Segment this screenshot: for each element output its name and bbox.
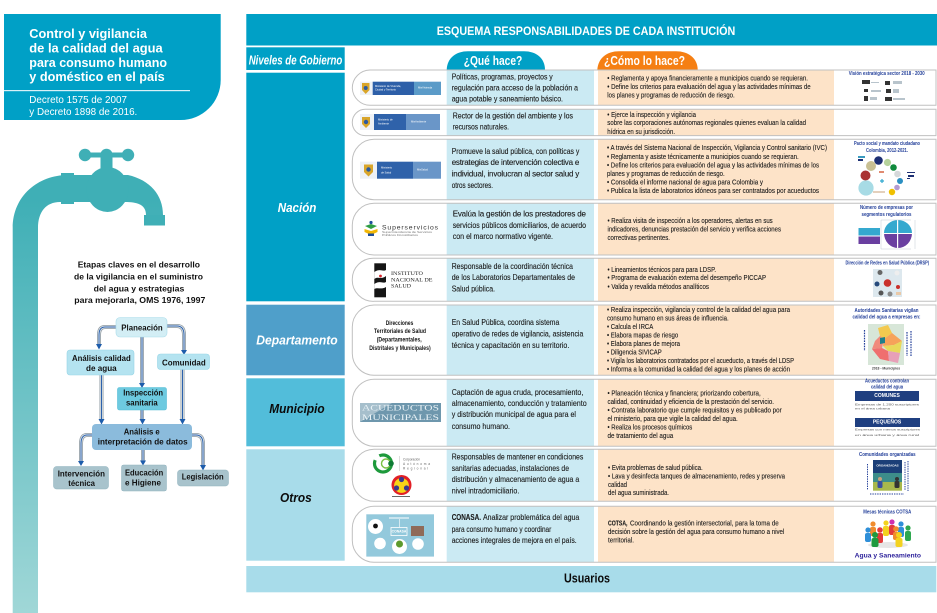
logo: Superservicios: Superservicios [382,224,439,232]
panel: title [4,14,221,120]
how: inspection [607,110,806,136]
what: environment: Rector de la gestión del ambiente y los [453,112,573,120]
box: Análisis calidad de agua [67,350,134,375]
logo: Superservicios: Superintendencia de Servicios [382,230,433,234]
image: aqueducts control quality: calidad del agua [871,384,904,390]
what: evaluates: servicios públicos domiciliarios, de acuerdo [453,221,586,230]
image: organized communities: ORGANIZADAS [876,464,899,468]
box: Análisis e interpretación de datos: Análisis e [124,427,160,437]
what: water capture: Captación de agua cruda, procesamiento, [452,388,583,397]
how: inspection and risk maps: • Diligencia SIVICAP [607,348,662,356]
what: water capture: consumo humano. [452,422,510,431]
logo: Ministerio de Ambiente: MinAmbiente [411,120,427,124]
box: Análisis e interpretación de datos: interpretación de datos [98,436,188,446]
logos: autonomous corporations [374,455,430,497]
how: technical planning: calidad, continuidad y eficiencia de la prestación del servicio. [608,397,774,406]
label: territorial health directorates: Direcciones [386,320,414,327]
what: environment [453,112,573,132]
how: IVC system: • Publica la lista de laboratorios idóneos para ser contratados por acueductos [607,186,819,195]
what: policies: regulación para acceso de la población a [452,84,578,92]
subtitle: decrees: Decreto 1575 de 2007 [29,94,127,106]
what: water capture: y distribución municipal de agua para el [452,410,576,419]
row: Otros users [352,449,936,501]
logos: autonomous corporations: Corporación [403,458,420,462]
image: aqueducts control quality: en área urbana y área rural [855,433,920,437]
level: Departamento [246,305,345,375]
logo: Ministerio de Ambiente [360,114,440,130]
what: CONASA [452,513,580,545]
how: COTSA: decisión sobre la gestión del agua para consumo humano a nivel [608,527,785,536]
row: Ministerio de Salud [352,139,936,200]
how: inspection and risk maps: • Elabora mapas de riesgo [607,330,678,340]
text: key stages heading: de la vigilancia en el suministro [74,271,203,281]
what: water capture [452,388,587,431]
image: Colombia map [852,308,921,370]
how: guidelines: • Valida y revalida métodos analíticos [608,282,709,291]
how: technical planning: • Planeación técnica y financiera; priorizando cobertura, [608,388,761,398]
how: inspection: hídrica en su jurisdicción. [607,127,675,136]
heading: Niveles de Gobierno [246,47,345,70]
what: public health: estrategias de intervención colectiva e [452,158,580,167]
image: organized communities: Comunidades organizadas [859,452,916,458]
icon: water faucet [13,149,165,613]
subtitle: decrees: y Decreto 1898 de 2016. [29,106,137,118]
box: Educación e Higiene [122,465,166,491]
image: aqueducts control quality: Empresas con menos suscriptores [855,428,921,432]
how: guidelines: • Programa de evaluación externa del desempeño PICCAP [608,273,766,282]
logos: autonomous corporations: Autónoma [403,462,430,466]
what: policies [452,72,578,104]
how: inspection visits: • Realiza visita de inspección a los operadores, alertas en sus [608,216,773,225]
image: COTSA technical tables: Mesas técnicas COTSA [863,510,911,516]
image: Colombia map: 2018 - Municipios [872,366,900,370]
label: territorial health directorates [369,320,431,352]
what: policies: agua potable y saneamiento básico. [452,94,563,104]
what: responsible users [452,452,583,496]
what: responsible users: sanitarias adecuadas, instalaciones de [452,464,569,473]
how: IVC system: planes y programas de reducción de riesgo. [607,169,725,178]
logo: Superservicios [364,221,439,237]
row: CONASA and COTSA [352,506,936,562]
text: key stages heading: Etapas claves en el desarrollo [78,259,200,269]
label: territorial health directorates: Territoriales de Salud [374,328,426,335]
how: technical planning [608,388,782,440]
how: inspection and risk maps [607,305,794,374]
logo: Ministerio de Salud [360,162,441,179]
how: IVC system [607,143,827,195]
box: Inspección sanitaria: Inspección [123,388,163,398]
subtitle: decrees [29,94,137,118]
logo: municipal aqueducts: MUNICIPALES [362,412,439,422]
what: technical coordination: de los Laboratorios Departamentales de [452,273,575,282]
how: inspection visits: correctivas pertinentes. [608,233,670,242]
level: Municipio: Municipio [269,401,325,416]
what: CONASA: CONASA. [452,513,481,522]
what: evaluates: Evalúa la gestión de los prestadores de [453,210,587,218]
logo: municipal aqueducts: ACUEDUCTOS [362,403,439,413]
what: CONASA: para consumo humano y coordinar [452,525,552,534]
what: technical coordination: Salud pública. [452,284,495,294]
what: CONASA: Analizar problemática del agua [483,513,580,522]
title: y doméstico en el país [29,69,165,84]
image: regulatory segments [858,205,915,249]
box: Planeación [116,318,167,337]
text: key stages heading [74,259,206,305]
what: public health: Promueve la salud pública, con políticas y [452,147,579,156]
box: Educación e Higiene: Educación [125,468,163,478]
what: coordinates surveillance: operativo de redes de vigilancia, asistencia [452,330,584,338]
image: COTSA technical tables [855,510,921,560]
box: Inspección sanitaria: sanitaria [126,397,158,407]
row: Superservicios [352,203,936,255]
tab: ¿Qué hace? [447,51,545,70]
box: Legislación [178,470,228,486]
how: avoids problems [608,463,786,497]
how: guidelines [608,265,766,291]
image: regulatory segments: Número de empresas por [860,205,914,211]
image: aqueducts control quality: Acueductos controlan [865,378,909,384]
logo: Ministerio de Vivienda [360,82,441,95]
how: technical planning: el ministerio, para que vigile la calidad del agua. [608,414,738,423]
tab: ¿Cómo lo hace?: ¿Cómo lo hace? [604,54,685,68]
box: Intervención técnica: Intervención [58,468,105,478]
logo: Superservicios: Públicos Domiciliarios [382,233,419,237]
how: technical planning: • Realiza los procesos químicos [608,422,692,432]
box: Planeación: Planeación [121,322,163,332]
image: COTSA technical tables: Agua y Saneamiento [855,552,921,560]
image: organized communities [859,452,916,494]
what: environment: recursos naturales. [453,122,509,132]
image: aqueducts control quality [855,378,921,437]
header bar: esquema: ESQUEMA RESPONSABILIDADES DE CADA INSTITUCIÓN [437,23,735,38]
box: Comunidad: Comunidad [162,358,206,368]
how: inspection and risk maps: consumo humano en sus áreas de influencia. [607,314,729,322]
how: regulates: • Define los criterios para evaluación del agua y las actividades mínimas de [607,82,811,91]
logo: Ministerio de Ambiente: Ambiente [378,122,390,126]
what: technical coordination: Responsable de la coordinación técnica [452,262,573,271]
row: Departamento [352,305,936,375]
how: avoids problems: • Lava y desinfecta tanques de almacenamiento, redes y preserva [608,472,786,480]
image: aqueducts control quality: Empresas de 1.200 suscriptores [855,402,920,406]
tab: ¿Qué hace?: ¿Qué hace? [464,54,522,68]
how: inspection and risk maps: • Realiza inspección, vigilancia y control de la calidad del agua para [607,305,791,314]
what: policies: Políticas, programas, proyectos y [452,72,553,82]
what: CONASA: acciones integrales de mejora en el país. [452,536,577,545]
level: Otros: Otros [280,490,312,505]
what: evaluates [453,210,587,241]
what: responsible users: nivel intradomiciliario. [452,486,519,496]
level: Municipio [246,378,345,446]
footer bar: Usuarios [246,566,936,592]
panel: government levels column [246,47,345,561]
what: water capture: almacenamiento, conducción y tratamiento [452,399,587,408]
what: coordinates surveillance: En Salud Pública, coordina sistema [452,318,560,327]
what: public health: individual, involucran al sector salud y [452,170,579,178]
box: Legislación: Legislación [182,472,224,482]
image: regulatory segments: segmentos regulatorios [862,212,912,218]
how: inspection visits [608,216,781,242]
box: Comunidad [158,354,210,370]
how: avoids problems: del agua suministrada. [608,488,669,497]
how: IVC system: • Define los criterios para evaluación del agua y las actividades mínimas de los [607,160,819,170]
logo: Ministerio de Salud: Ministerio [381,166,393,170]
label: territorial health directorates: Distritales y Municipales) [369,345,431,352]
image: Colombia map: calidad del agua a empresas en: [852,314,921,320]
what: evaluates: con el marco normativo vigente. [453,232,553,241]
title: de la calidad del agua [29,40,163,56]
pipes and arrows [78,326,206,470]
what: public health: otros sectores. [452,181,493,190]
flow diagram [54,318,228,491]
logo: INS: SALUD [391,284,411,290]
logo: Ministerio de Vivienda: MinVivienda [418,86,433,90]
how: COTSA [608,518,785,544]
title [29,26,167,84]
level: Departamento: Departamento [256,332,338,348]
how: avoids problems: calidad [608,480,627,489]
what: responsible users: Responsables de mantener en condiciones [452,452,583,462]
row: Municipio [352,378,936,446]
what: technical coordination [452,262,575,294]
how: IVC system: • Consolida el informe nacional de agua para Colombia y [607,178,763,186]
logo: Ministerio de Salud: MinSalud [417,168,428,172]
box: Inspección sanitaria [118,388,166,410]
image: aqueducts control quality: PEQUEÑOS [873,419,902,426]
how: inspection and risk maps: • Calcula el IRCA [607,322,653,331]
level: Nación [246,73,345,301]
image: aqueducts control quality: en el área urbana [855,407,890,411]
how: inspection and risk maps: • Informa a la comunidad la calidad del agua y los planes de acción [607,364,790,374]
image: social pact: Colombia, 2012-2021. [866,148,908,154]
how: IVC system: • A través del Sistema Nacional de Inspección, Vigilancia y Control sanitario (IVC) [607,143,827,152]
box: Educación e Higiene: e Higiene [125,478,161,488]
box: Análisis calidad de agua: Análisis calidad [72,353,131,363]
image: aqueducts control quality: COMUNES [874,393,900,399]
how: regulates: los planes y programas de reducción de riesgo. [607,90,735,100]
box: Intervención técnica [54,466,108,489]
logo: INS [374,263,433,297]
tab: ¿Cómo lo hace? [597,51,698,70]
what: coordinates surveillance [452,318,584,350]
logo: Ministerio de Salud: de Salud [381,170,392,174]
logos: autonomous corporations: Regional [403,467,428,471]
diagram: CONASA [366,514,434,557]
how: inspection: sobre las corporaciones autónomas regionales quienes evaluan la calidad [607,118,806,127]
how: IVC system: • Reglamenta y asiste técnicamente a municipios cuando se requieran. [607,152,799,161]
text: key stages heading: del agua y estrategias [94,283,185,293]
what: public health [452,147,580,190]
how: technical planning: de tratamiento del agua [608,431,674,440]
how: technical planning: • Contrata laboratorio que cumple requisitos y es publicado por [608,406,782,414]
footer bar: Usuarios: Usuarios [564,570,610,586]
box: Intervención técnica: técnica [68,478,95,488]
how: inspection and risk maps: • Vigila los laboratorios contratados por el acueducto, a través del LDSP [607,356,794,365]
level: Nación: Nación [278,200,316,215]
image: public health networks [846,260,929,297]
row: Instituto Nacional de Salud [352,258,936,301]
title: Control y vigilancia [29,26,148,41]
text: key stages heading: para mejorarla, OMS 1976, 1997 [74,295,206,305]
box: Análisis e interpretación de datos [92,424,192,450]
what: responsible users: distribución y almacenamiento de agua a [452,475,580,484]
level: Otros [246,449,345,561]
how: COTSA: COTSA, [608,518,628,528]
how: COTSA: territorial. [608,536,634,544]
row: Ministerio de Ambiente [352,109,936,136]
label: territorial health directorates: (Departamentales, [377,336,422,344]
heading: Niveles de Gobierno: Niveles de Gobierno [249,52,342,68]
box: Análisis calidad de agua: de agua [86,363,117,373]
image: sector vision [849,71,925,101]
how: avoids problems: • Evita problemas de salud pública. [608,463,703,472]
logo: municipal aqueducts [360,403,441,422]
logo: INS: INSTITUTO [391,271,423,277]
what: coordinates surveillance: técnica y capacitación en su territorio. [452,341,569,350]
how: regulates [607,74,811,100]
logo: INS: NACIONAL DE [391,278,433,284]
image: social pact [854,141,920,196]
row: Ministerio de Vivienda [352,70,936,105]
how: regulates: • Reglamenta y apoya financieramente a municipios cuando se requieran. [607,74,808,82]
how: inspection: • Ejerce la inspección y vigilancia [607,110,697,119]
how: guidelines: • Lineamientos técnicos para para LDSP. [608,265,716,274]
how: inspection and risk maps: • Elabora planes de mejora [607,339,681,348]
how: COTSA: Coordinando la gestión intersectorial, para la toma de [630,518,779,528]
title: para consumo humano [29,55,167,70]
how: inspection visits: indicadores, denuncias prestación del servicio y verifica acciones [608,224,781,234]
diagram: CONASA: CONASA [392,530,407,534]
logo: Ministerio de Ambiente: Ministerio de [378,118,393,122]
image: Colombia map: Autoridades Sanitarias vigilan [854,308,919,314]
logo: Ministerio de Vivienda: Ministerio de Vivienda, [375,84,401,88]
header bar: esquema [246,14,937,46]
logo: Ministerio de Vivienda: Ciudad y Territorio [375,88,397,92]
